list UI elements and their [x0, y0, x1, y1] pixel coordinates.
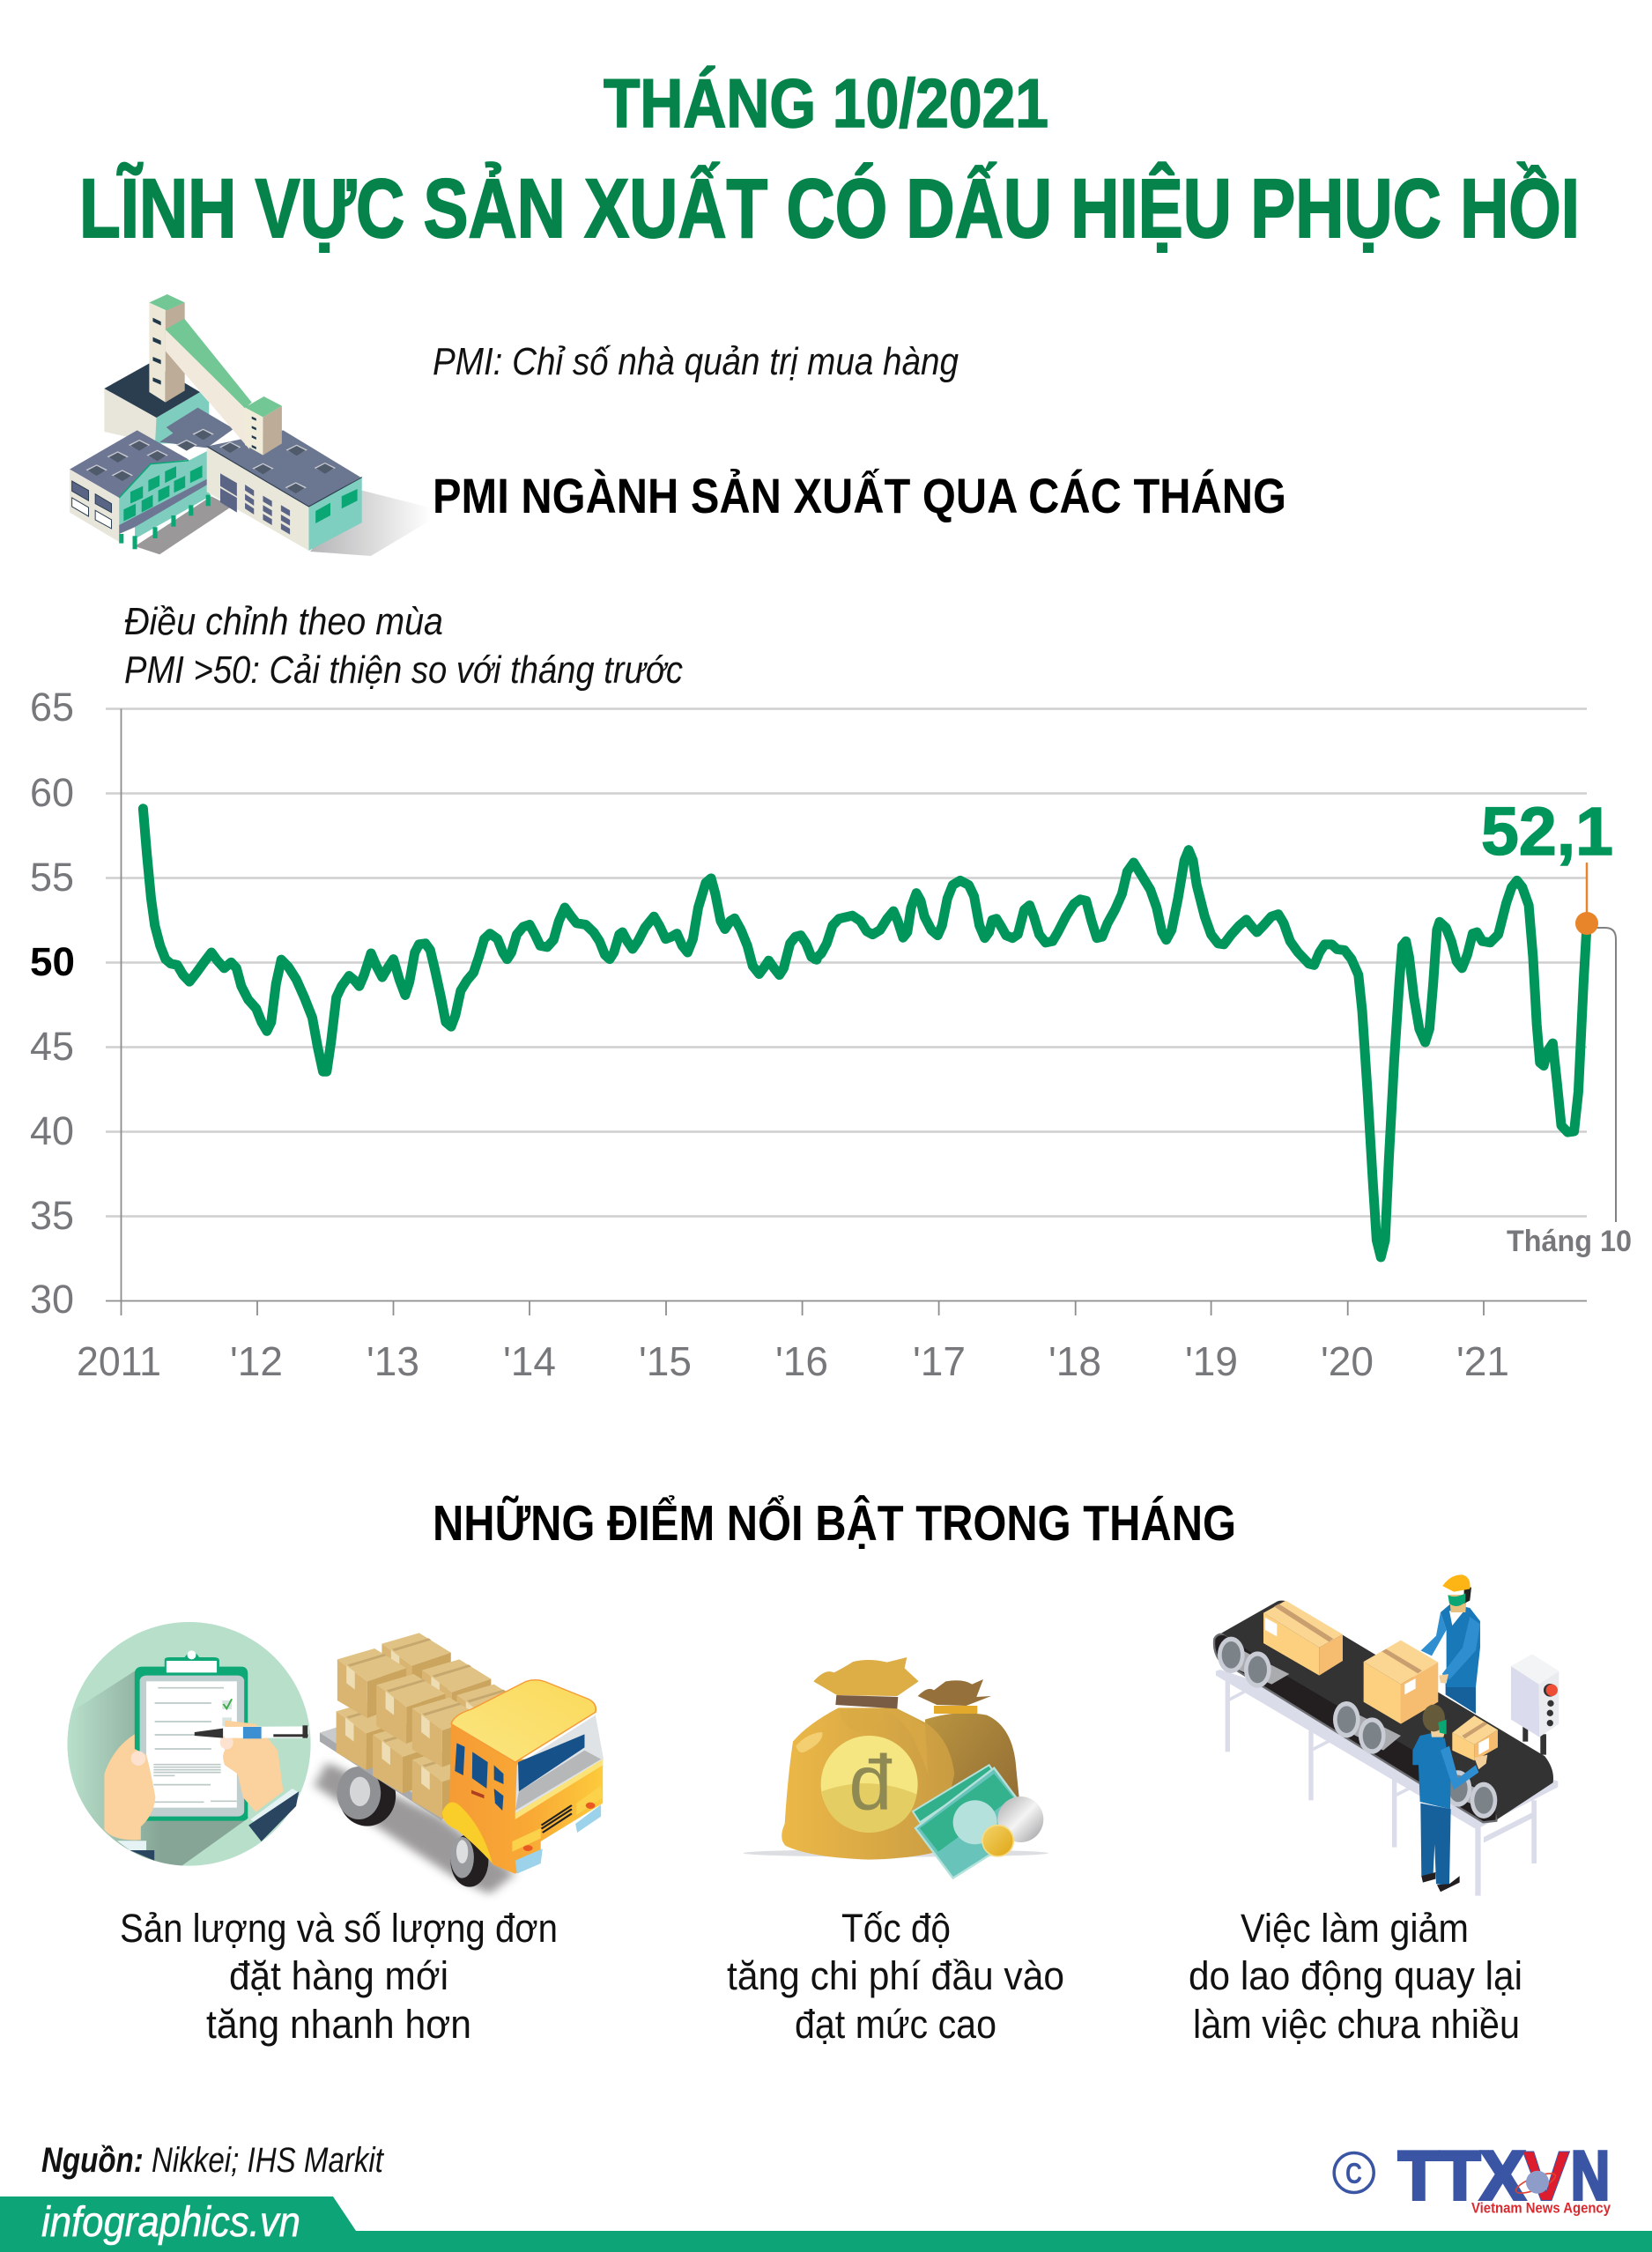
x axis labels: '13: [367, 1338, 419, 1384]
caption: employment: do lao động quay lại: [1189, 1953, 1522, 1998]
copyright mark: [1334, 2153, 1374, 2192]
caption: input cost: đạt mức cao: [795, 2002, 996, 2047]
x axis labels: '18: [1048, 1338, 1101, 1384]
chart notes: Điều chỉnh theo mùa: [124, 600, 443, 643]
caption: output and orders: [120, 1906, 558, 2047]
section heading: NHỮNG ĐIỂM NỔI BẬT TRONG THÁNG: [433, 1494, 1236, 1552]
month label: Tháng 10: [1507, 1225, 1632, 1258]
x axis labels: '17: [913, 1338, 966, 1384]
icon: conveyor belt and workers: [1214, 1574, 1559, 1896]
y axis labels: 40: [30, 1108, 74, 1153]
icon: factory: [70, 294, 432, 556]
x axis labels: [77, 1338, 1509, 1384]
x axis labels: '15: [639, 1338, 692, 1384]
y axis labels: 35: [30, 1193, 74, 1238]
data line 2016-2021: [815, 850, 1587, 1257]
data line 2011-2016: [143, 809, 817, 1071]
chart notes: [124, 600, 683, 692]
worker 2: [1412, 1705, 1487, 1892]
caption: employment: Việc làm giảm: [1241, 1906, 1469, 1951]
icon: clipboard and truck: [66, 1622, 604, 1894]
logo: TTXVN: [1334, 2137, 1611, 2217]
icon: clipboard: [66, 1622, 311, 1866]
icon: money bags: [743, 1657, 1048, 1878]
caption: input cost: Tốc độ: [841, 1906, 951, 1951]
box 3: [1452, 1715, 1498, 1760]
x axis labels: '14: [503, 1338, 556, 1384]
x axis labels: '16: [775, 1338, 828, 1384]
x axis labels: 2011: [77, 1338, 161, 1384]
y axis labels: 55: [30, 855, 74, 900]
title line 1: THÁNG 10/2021: [604, 64, 1048, 142]
footer banner: [0, 2196, 1652, 2252]
logo: TTXVN: TTX: [1398, 2137, 1525, 2214]
chart heading: PMI NGÀNH SẢN XUẤT QUA CÁC THÁNG: [433, 468, 1286, 523]
box 2: [1364, 1641, 1438, 1724]
logo: TTXVN: Vietnam News Agency: [1471, 2200, 1611, 2217]
x axis labels: '19: [1185, 1338, 1238, 1384]
y axis labels: 30: [30, 1277, 74, 1322]
control box: [1511, 1654, 1559, 1755]
x axis labels: '20: [1321, 1338, 1374, 1384]
logo: TTXVN: N: [1571, 2137, 1610, 2214]
value label: 52,1: [1481, 794, 1613, 870]
box 1: [1263, 1601, 1343, 1676]
icon: truck: [315, 1633, 604, 1894]
copyright mark: C: [1345, 2157, 1362, 2189]
logo: TTXVN: V: [1522, 2137, 1570, 2217]
x axis labels: '21: [1456, 1338, 1509, 1384]
caption: output and orders: tăng nhanh hơn: [206, 2002, 471, 2047]
caption: employment: [1189, 1906, 1522, 2047]
source note: Nguồn: Nikkei; IHS Markit: [41, 2141, 385, 2180]
caption: output and orders: Sản lượng và số lượng đơn: [120, 1906, 558, 1951]
caption: input cost: tăng chi phí đầu vào: [727, 1953, 1064, 1998]
title: [79, 64, 1580, 256]
caption: employment: làm việc chưa nhiều: [1193, 2002, 1520, 2047]
worker 1: [1421, 1574, 1480, 1714]
chart notes: PMI >50: Cải thiện so với tháng trước: [124, 648, 683, 692]
website label: infographics.vn: [41, 2199, 300, 2246]
y axis labels: 65: [30, 685, 74, 730]
x axis labels: '12: [230, 1338, 283, 1384]
y axis labels: 45: [30, 1024, 74, 1069]
line chart: PMI: [30, 685, 1632, 1384]
y axis labels: 50: [30, 939, 75, 984]
dong sign: đ: [848, 1738, 892, 1826]
caption: input cost: [727, 1906, 1064, 2047]
caption: output and orders: đặt hàng mới: [229, 1953, 448, 1998]
callout: October marker: [1575, 863, 1616, 1222]
y axis labels: 60: [30, 770, 74, 815]
y axis labels: [30, 685, 75, 1322]
definition note: PMI: Chỉ số nhà quản trị mua hàng: [433, 340, 959, 383]
